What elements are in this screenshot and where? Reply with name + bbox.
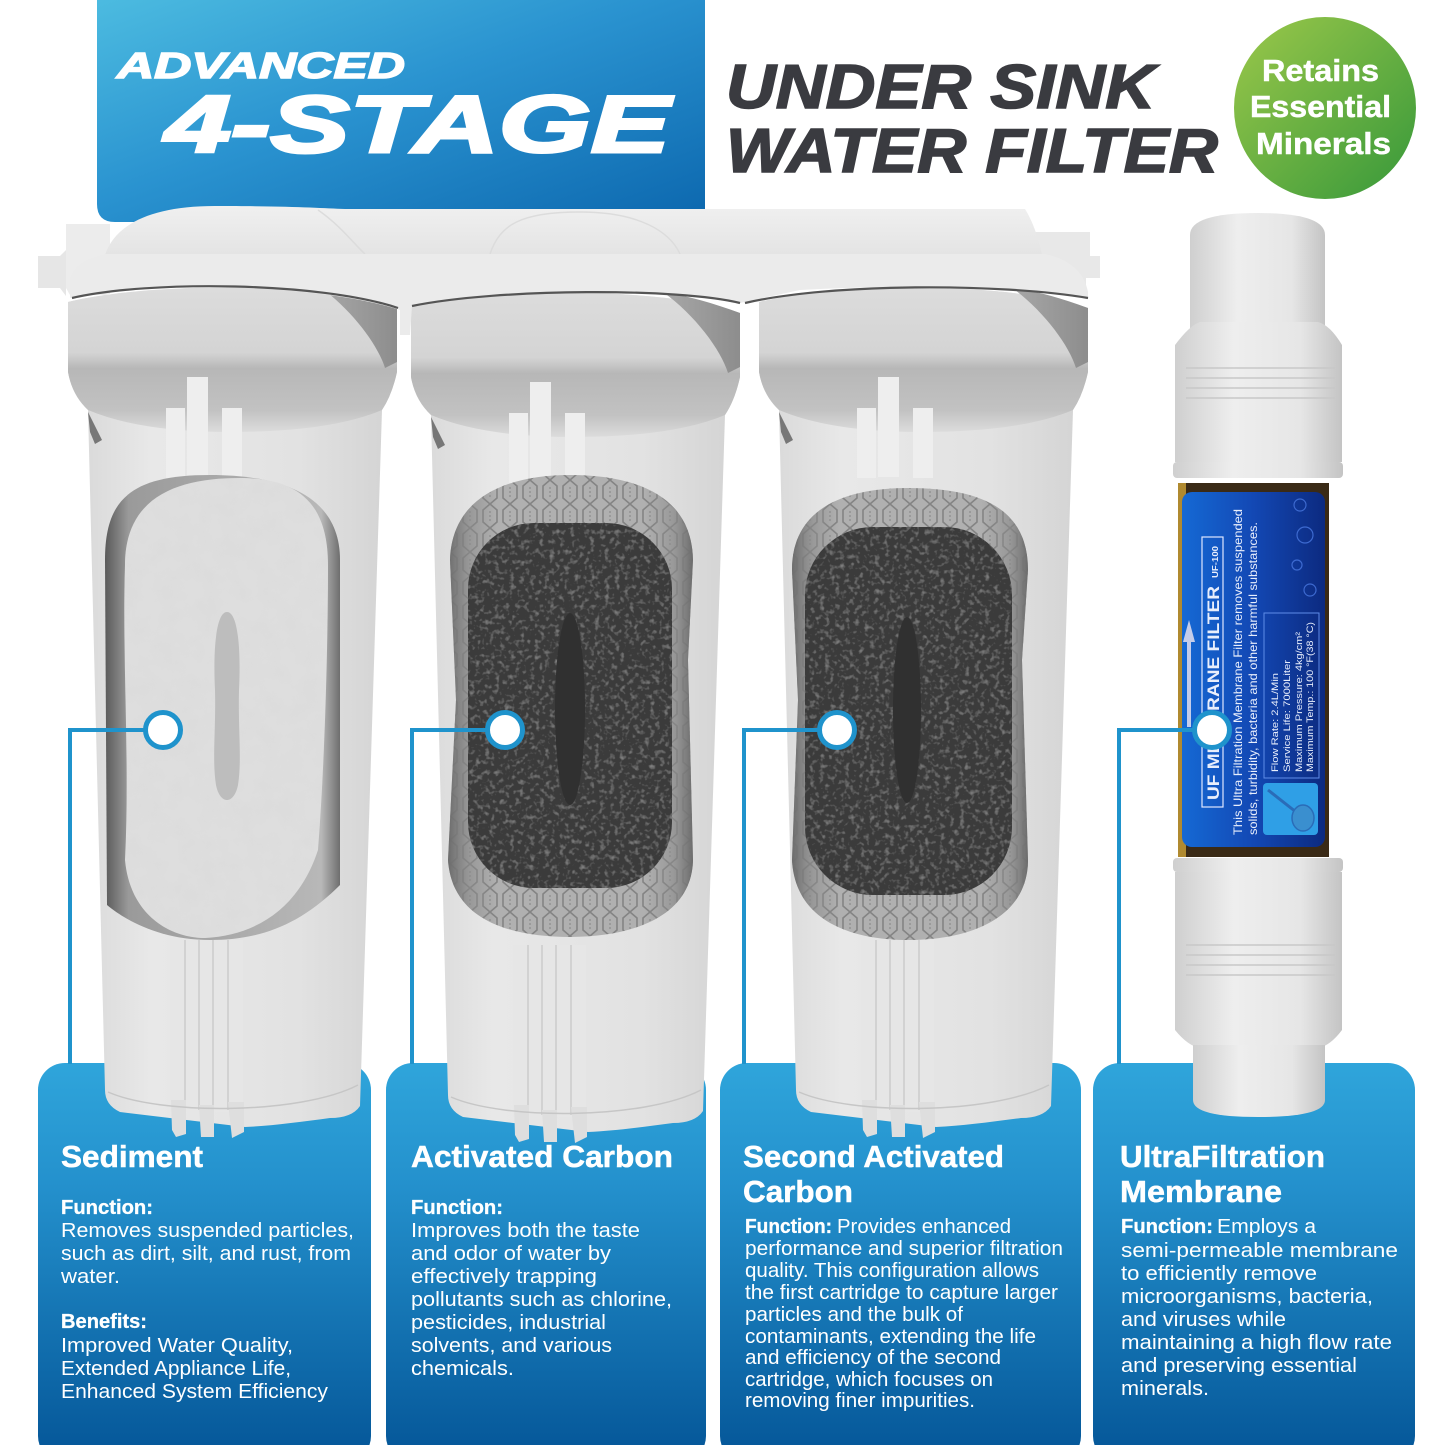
- text: sediment: Sediment: [61, 1139, 203, 1174]
- text: sediment: [60, 1139, 354, 1403]
- window: activated carbon: [448, 475, 693, 937]
- window: sediment: [105, 475, 340, 940]
- filter label: UF MEMBRANE FILTER: [1204, 586, 1223, 800]
- text: sediment: Benefits:: [61, 1311, 147, 1333]
- filter label: Maximum Temp.: 100 °F(38 °C): [1305, 622, 1316, 772]
- callout connector: sediment: [70, 712, 180, 1064]
- panel: activated carbon background: [386, 1063, 706, 1445]
- text: second activated carbon: Second Activated: [743, 1139, 1004, 1174]
- text: second activated carbon: Carbon: [743, 1174, 853, 1209]
- text: second activated carbon: contaminants, extending the life: [745, 1325, 1036, 1348]
- text: second activated carbon: quality. This configuration allows: [745, 1259, 1039, 1282]
- text: ultrafiltration membrane: and viruses while: [1121, 1308, 1286, 1331]
- text: second activated carbon: Provides enhanced: [837, 1215, 1011, 1238]
- text: sediment: Extended Appliance Life,: [61, 1357, 291, 1380]
- text: ultrafiltration membrane: Membrane: [1120, 1174, 1282, 1209]
- panel: ultrafiltration background: [1093, 1063, 1415, 1445]
- badge: retains essential minerals: Essential: [1250, 89, 1391, 124]
- text: ultrafiltration membrane: Function:: [1121, 1216, 1213, 1238]
- panel: second activated carbon background: [720, 1063, 1081, 1445]
- text: sediment: Enhanced System Efficiency: [61, 1380, 329, 1403]
- text: ultrafiltration membrane: semi-permeable membrane: [1121, 1239, 1398, 1262]
- callout connector: second activated carbon: [744, 712, 854, 1064]
- filter label: Maximum Pressure: 4kg/cm²: [1294, 632, 1305, 772]
- text: activated carbon: [411, 1139, 673, 1380]
- filter housing assembly: [38, 206, 1100, 1143]
- text: second activated carbon: performance and superior filtration: [745, 1237, 1063, 1260]
- title: UNDER SINK: [726, 53, 1160, 122]
- text: activated carbon: pollutants such as chlorine,: [411, 1288, 672, 1311]
- text: second activated carbon: removing finer impurities.: [745, 1389, 975, 1412]
- text: activated carbon: Improves both the taste: [411, 1219, 640, 1242]
- text: second activated carbon: cartridge, which focuses on: [745, 1368, 993, 1391]
- housing two: [411, 292, 740, 1143]
- filter label: Service Life: 7000Liter: [1282, 660, 1293, 772]
- filter label: [1178, 483, 1329, 857]
- housing one: [68, 287, 397, 1138]
- text: sediment: Improved Water Quality,: [61, 1334, 293, 1357]
- text: activated carbon: Function:: [411, 1197, 503, 1219]
- heading: advanced: ADVANCED: [116, 45, 405, 86]
- heading: 4-stage: 4-STAGE: [162, 80, 674, 170]
- text: second activated carbon: [743, 1139, 1063, 1412]
- title: [726, 53, 1218, 186]
- filter label: UF-100: [1211, 545, 1220, 578]
- badge: retains essential minerals: Retains: [1262, 53, 1379, 88]
- text: ultrafiltration membrane: Employs a: [1217, 1215, 1317, 1238]
- filter label: This Ultra Filtration Membrane Filter removes suspended: [1231, 509, 1245, 835]
- text: sediment: Removes suspended particles,: [61, 1219, 354, 1242]
- text: ultrafiltration membrane: maintaining a high flow rate: [1121, 1331, 1392, 1354]
- text: ultrafiltration membrane: to efficiently remove: [1121, 1262, 1317, 1285]
- text: sediment: water.: [60, 1265, 120, 1288]
- text: second activated carbon: particles and the bulk of: [745, 1303, 963, 1326]
- text: ultrafiltration membrane: microorganisms, bacteria,: [1121, 1285, 1373, 1308]
- text: activated carbon: chemicals.: [411, 1357, 514, 1380]
- ultrafiltration membrane cartridge: [1173, 213, 1343, 1117]
- header banner: [97, 0, 705, 222]
- text: activated carbon: effectively trapping: [411, 1265, 597, 1288]
- text: second activated carbon: the first cartridge to capture larger: [745, 1281, 1058, 1304]
- badge: retains essential minerals: Minerals: [1256, 126, 1391, 161]
- text: ultrafiltration membrane: minerals.: [1121, 1377, 1209, 1400]
- text: activated carbon: Activated Carbon: [411, 1139, 673, 1174]
- housing three: [759, 287, 1088, 1138]
- text: sediment: Function:: [61, 1197, 153, 1219]
- filter label: solids, turbidity, bacteria and other harmful substances.: [1246, 522, 1260, 835]
- text: activated carbon: solvents, and various: [411, 1334, 612, 1357]
- callout connector: activated carbon: [412, 712, 522, 1064]
- panel: sediment background: [38, 1063, 371, 1445]
- text: sediment: such as dirt, silt, and rust, from: [61, 1242, 351, 1265]
- top cap: [38, 206, 1100, 335]
- text: ultrafiltration membrane: [1120, 1139, 1398, 1400]
- title: WATER FILTER: [726, 117, 1218, 186]
- text: second activated carbon: and efficiency of the second: [745, 1346, 1001, 1369]
- text: second activated carbon: Function:: [745, 1216, 832, 1238]
- badge: retains essential minerals: [1234, 17, 1416, 199]
- filter label: Flow Rate: 2.4L/Min: [1270, 673, 1281, 772]
- window: second carbon: [792, 488, 1028, 940]
- text: ultrafiltration membrane: UltraFiltration: [1120, 1139, 1325, 1174]
- text: ultrafiltration membrane: and preserving essential: [1121, 1354, 1357, 1377]
- callout connector: ultrafiltration membrane: [1119, 712, 1230, 1064]
- text: activated carbon: and odor of water by: [411, 1242, 612, 1265]
- text: activated carbon: pesticides, industrial: [411, 1311, 606, 1334]
